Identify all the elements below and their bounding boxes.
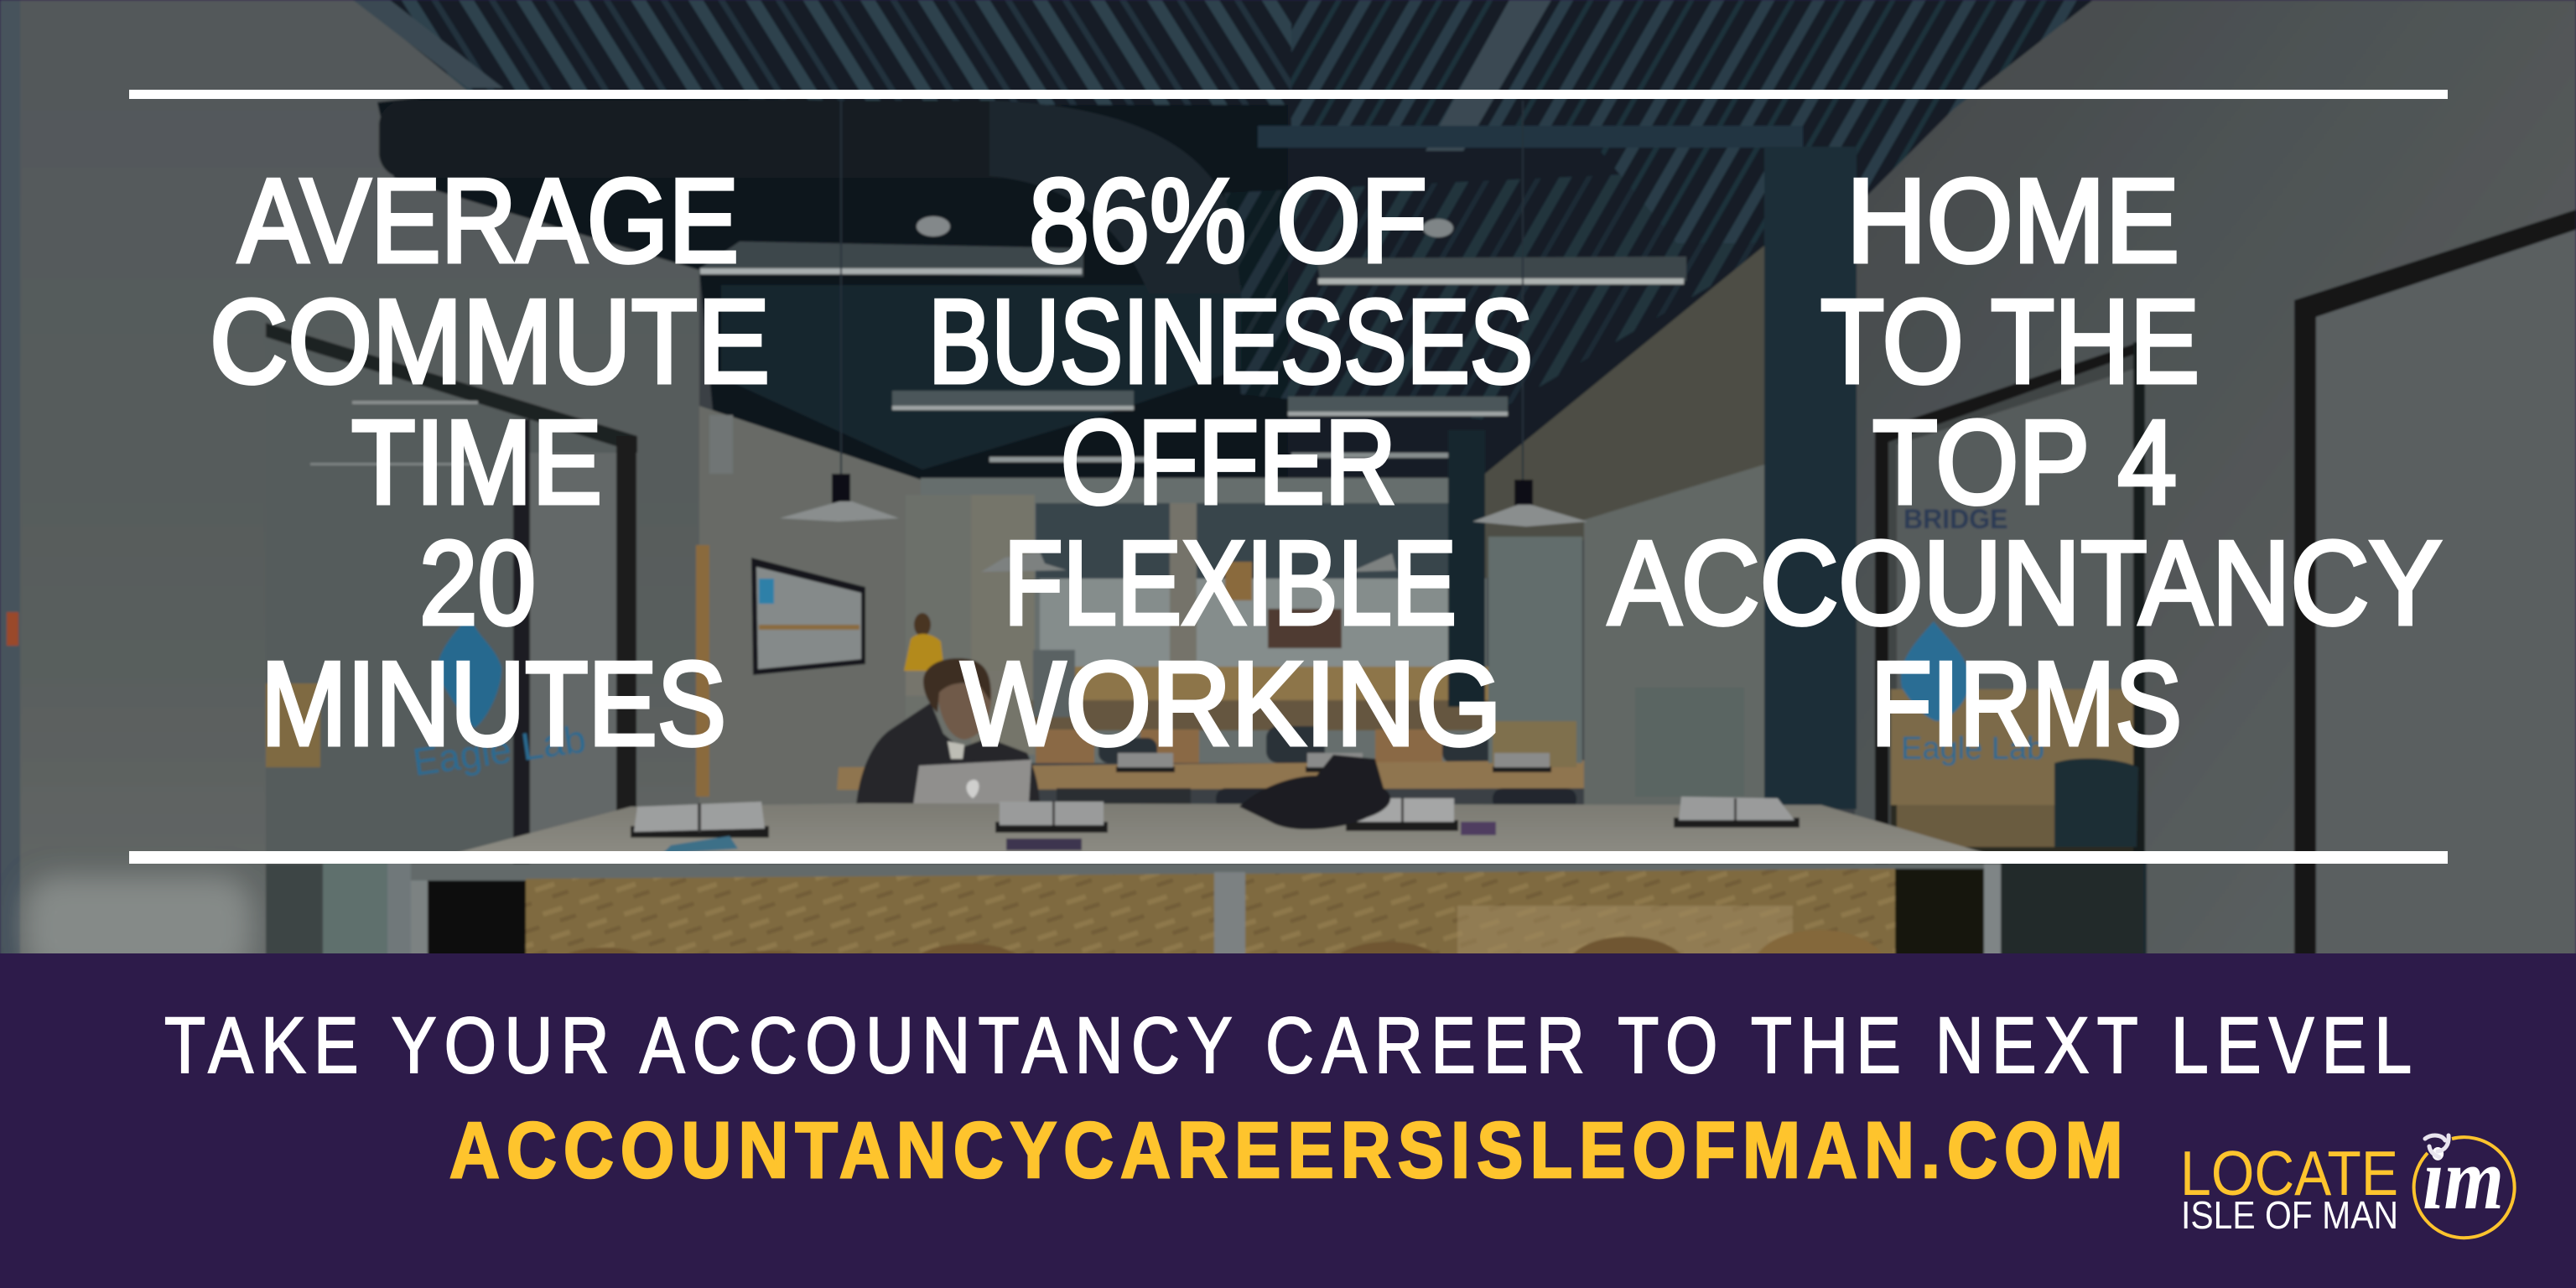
laptop bbox=[910, 760, 1031, 828]
icon: blue eagle on meeting room glass bbox=[1901, 621, 1971, 721]
front table bbox=[453, 803, 1987, 854]
stat column: top 4 firms: TOP 4 bbox=[1872, 396, 2177, 529]
logo wordmark: Isle of Man: ISLE OF MAN bbox=[2181, 1193, 2398, 1237]
side wall left of distant office bbox=[699, 406, 921, 809]
stat column: top 4 firms: ACCOUNTANCY bbox=[1608, 517, 2442, 650]
background photo: office interior bbox=[0, 0, 2576, 1007]
footer headline: TAKE YOUR ACCOUNTANCY CAREER TO THE NEXT LEVEL bbox=[164, 1001, 2412, 1089]
black jacket bbox=[1239, 755, 1390, 829]
stat column: average commute: AVERAGE bbox=[238, 154, 739, 288]
stat column: flexible working: OFFER bbox=[1061, 396, 1396, 529]
stat column: flexible working: WORKING bbox=[961, 637, 1502, 771]
bottom rule bbox=[129, 851, 2448, 864]
stat column: top 4 firms bbox=[1608, 154, 2442, 771]
logo: Locate Isle of Man bbox=[2180, 1130, 2515, 1238]
left wall bbox=[0, 0, 699, 977]
ceiling lights bbox=[698, 216, 1686, 462]
pendant lamps bbox=[780, 101, 1587, 572]
cable trays bbox=[353, 0, 503, 88]
right wall bbox=[1855, 0, 2576, 956]
icon: triskelion bbox=[2425, 1135, 2449, 1157]
power sockets bbox=[631, 753, 1800, 838]
wall poster bbox=[751, 558, 865, 675]
table base with OSB panels bbox=[266, 854, 2143, 956]
stat column: flexible working bbox=[928, 154, 1533, 771]
door jamb and wall fittings bbox=[696, 545, 709, 797]
right door bbox=[2294, 210, 2576, 956]
second column bbox=[1448, 430, 1485, 707]
logo ring bbox=[2414, 1137, 2515, 1238]
ceiling bbox=[353, 0, 2093, 503]
stools bbox=[558, 930, 1887, 1007]
footer website address: ACCOUNTANCYCAREERSISLEOFMAN.COM bbox=[449, 1105, 2123, 1194]
glass meeting room: BRIDGE bbox=[1903, 504, 2007, 534]
leaflets on table bbox=[662, 822, 1496, 854]
stat column: average commute: TIME bbox=[351, 396, 602, 529]
stat column: top 4 firms: TO THE bbox=[1820, 275, 2199, 408]
top rule bbox=[129, 90, 2448, 99]
left door with glass bbox=[266, 323, 637, 864]
stat column: flexible working: BUSINESSES bbox=[928, 275, 1533, 408]
stat column: flexible working: 86% OF bbox=[1029, 154, 1427, 288]
logo script im: im bbox=[2423, 1130, 2504, 1228]
stat column: flexible working: FLEXIBLE bbox=[1004, 517, 1457, 650]
left door with glass: Eagle Lab bbox=[410, 717, 589, 784]
ventilation duct bbox=[379, 101, 1803, 293]
office chair bbox=[2054, 759, 2138, 847]
wooden desk bbox=[837, 755, 1761, 813]
distant office bbox=[906, 478, 1501, 763]
main column bbox=[1764, 147, 1857, 809]
stat column: top 4 firms: FIRMS bbox=[1871, 637, 2182, 771]
stat column: top 4 firms: HOME bbox=[1846, 154, 2179, 288]
stat column: average commute: 20 bbox=[419, 517, 536, 650]
stat column: average commute bbox=[210, 154, 770, 771]
stat column: average commute: COMMUTE bbox=[210, 275, 770, 408]
footer band bbox=[0, 953, 2576, 1288]
logo wordmark: Locate: LOCATE bbox=[2180, 1138, 2398, 1208]
back row chairs bbox=[1036, 730, 1442, 763]
glass meeting room bbox=[1875, 340, 2147, 956]
man with laptop bbox=[856, 658, 1040, 828]
stat column: average commute: MINUTES bbox=[261, 637, 726, 771]
glass meeting room: Eagle Lab bbox=[1901, 731, 2044, 766]
glass wall beside column bbox=[1485, 246, 1764, 805]
woman in yellow bbox=[904, 613, 944, 671]
icon: blue eagle on door glass bbox=[437, 616, 501, 728]
